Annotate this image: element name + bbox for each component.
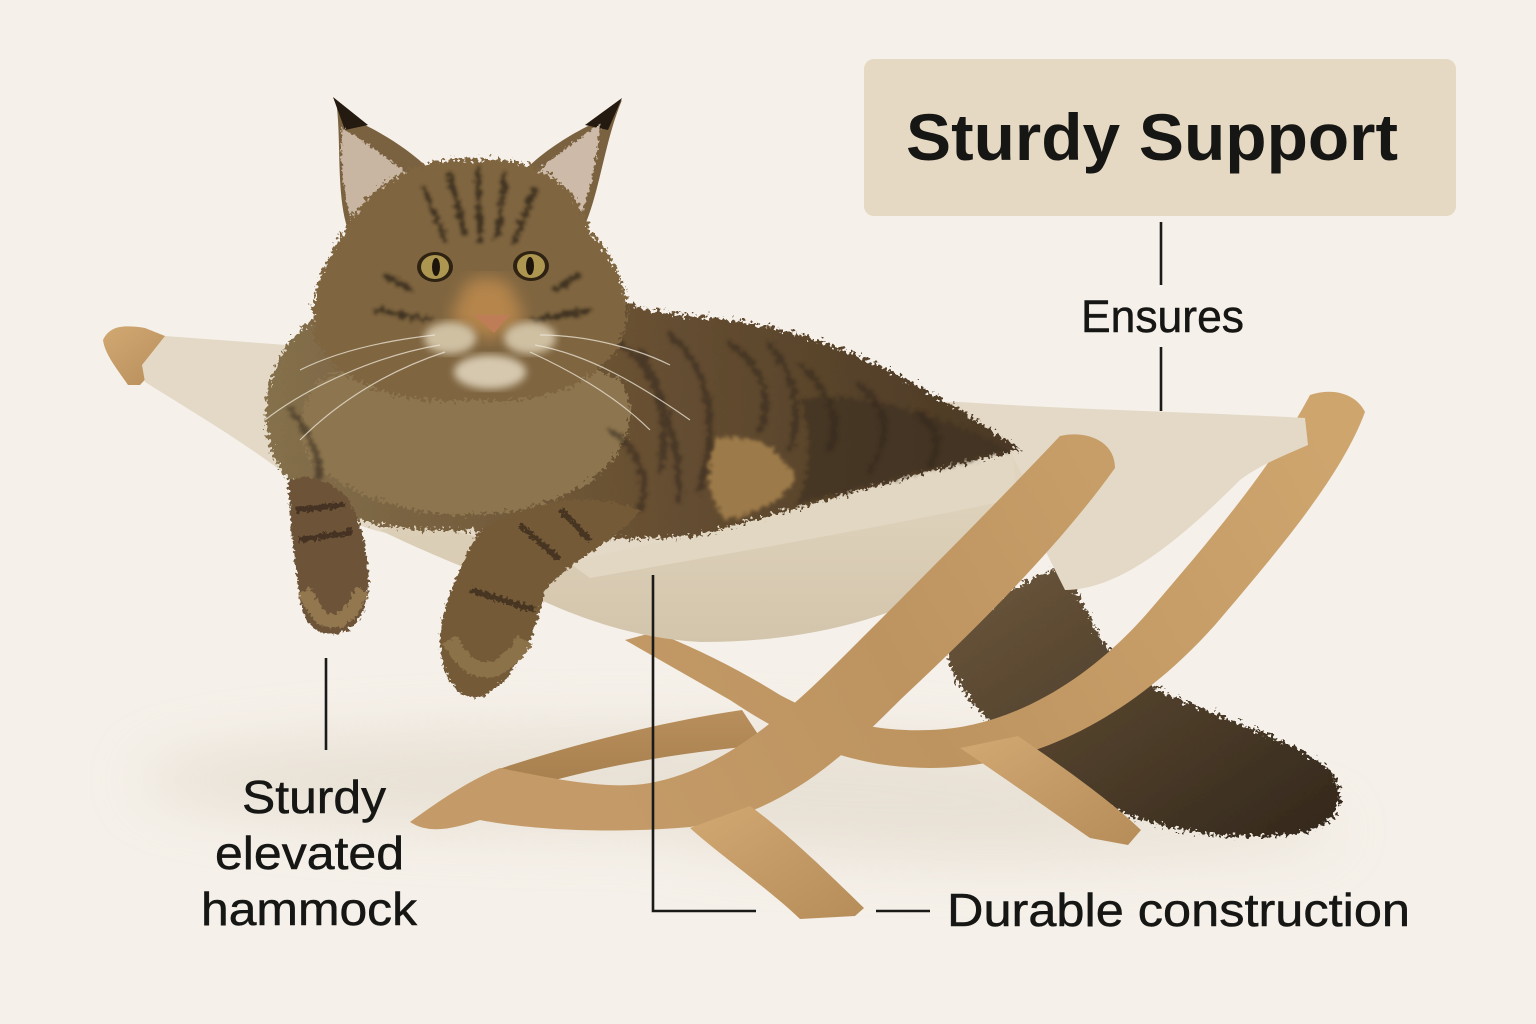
cat: [265, 97, 1020, 698]
label: ensures: Ensures: [1081, 291, 1244, 342]
warm flank: [708, 437, 795, 520]
right hanging paw: [440, 500, 640, 698]
right inner ear: [530, 125, 600, 212]
rear left stub: [103, 326, 180, 385]
front sling: [380, 455, 1030, 642]
left inner ear: [341, 128, 418, 222]
label: sturdy elevated hammock: Sturdy: [242, 771, 386, 823]
front foot: [690, 806, 864, 919]
whiskers: [265, 335, 690, 440]
head: [265, 97, 690, 440]
label: sturdy elevated hammock: hammock: [201, 883, 418, 935]
curved leg: [410, 434, 1115, 831]
far edge and interior: [142, 336, 1308, 590]
left ear: [336, 100, 430, 235]
back arc: [625, 392, 1365, 768]
front hem: [568, 455, 1018, 578]
right ear tuft: [585, 98, 622, 130]
wooden frame: [103, 326, 1365, 845]
nose and muzzle: [424, 278, 556, 389]
forehead stripes: [375, 170, 590, 320]
left hanging paw: [288, 477, 369, 634]
cat body: [266, 297, 1020, 538]
body stripes: [290, 335, 937, 510]
label: durable construction: Durable construction: [947, 884, 1410, 936]
rear cross brace: [490, 710, 765, 790]
label: sturdy elevated hammock: [201, 771, 418, 935]
right ear: [525, 100, 622, 225]
chest fur: [301, 358, 630, 515]
title box: Sturdy Support: [906, 100, 1398, 174]
callout lines: [326, 222, 1161, 911]
left ear tuft: [333, 97, 368, 130]
front arc: [410, 434, 1115, 919]
eyes: [417, 251, 549, 282]
label: sturdy elevated hammock: elevated: [215, 827, 404, 879]
floor shadow: [140, 730, 1340, 858]
hammock fabric: [142, 336, 1308, 642]
back right foot: [960, 736, 1141, 845]
title box: [864, 59, 1456, 216]
face: [312, 159, 627, 401]
dark haunch: [795, 398, 1010, 505]
cat tail: [948, 568, 1340, 836]
